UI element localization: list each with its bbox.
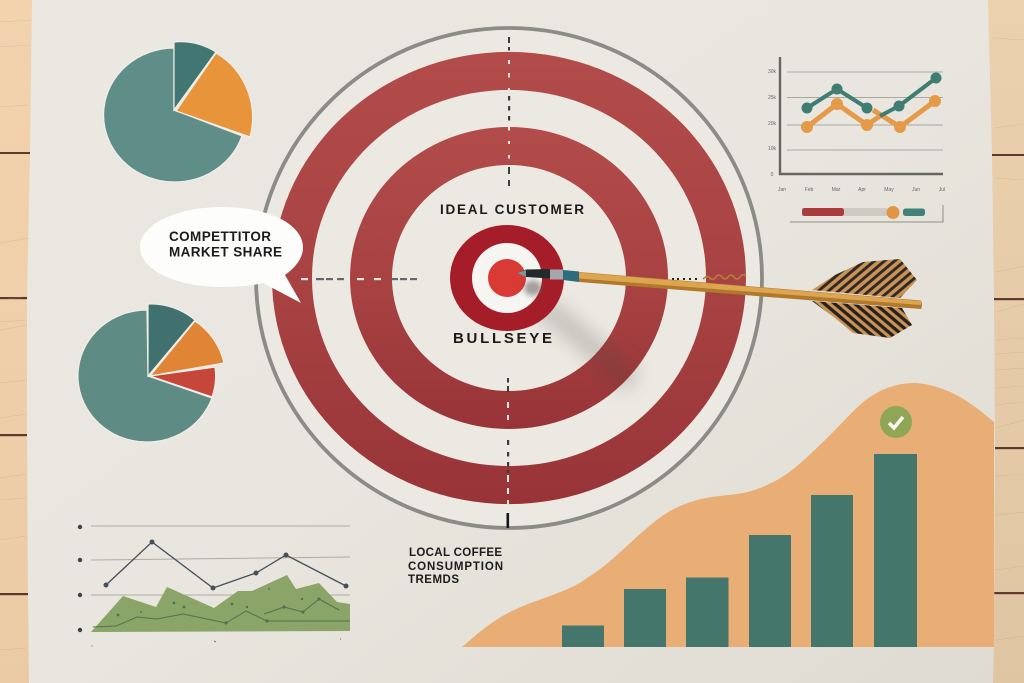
legend bar	[790, 205, 943, 222]
inner green lines	[93, 588, 350, 627]
callout: competitor market share: COMPETTITOR	[169, 229, 271, 244]
axis labels: 30k	[768, 69, 777, 75]
label: local coffee consumption trends: TREMDS	[408, 574, 459, 586]
axis labels: 20k	[768, 121, 777, 127]
bars	[562, 454, 917, 647]
label: local coffee consumption trends: LOCAL COFFEE	[409, 547, 502, 559]
dark line	[104, 540, 348, 590]
callout: competitor market share	[140, 207, 303, 303]
line chart: top right	[768, 57, 945, 222]
axis labels: Apr	[858, 187, 866, 193]
axis labels: Feb	[805, 187, 814, 193]
pie chart: top	[104, 42, 253, 182]
tip and collar	[517, 269, 579, 282]
icon: check badge	[880, 406, 912, 438]
outer red ring	[272, 52, 746, 504]
crosshair dashes	[301, 37, 510, 528]
area and line chart: bottom left	[78, 525, 350, 646]
axis labels: Mar	[832, 187, 841, 193]
axis labels: May	[884, 187, 894, 193]
callout: competitor market share: MARKET SHARE	[169, 244, 282, 260]
fletching	[812, 259, 917, 338]
axes	[780, 57, 943, 174]
shaft	[579, 272, 922, 309]
axis labels: 25k	[768, 95, 777, 101]
orange hill	[462, 383, 994, 647]
pie chart: bottom	[78, 304, 224, 442]
gridlines	[91, 526, 350, 595]
gridlines	[787, 72, 943, 150]
bullseye	[450, 225, 564, 331]
target outer grey ring	[256, 28, 762, 528]
arrow shadow	[525, 288, 640, 392]
teal series	[802, 72, 942, 116]
inner red ring	[350, 127, 668, 429]
target	[256, 28, 762, 528]
growth chart: bottom right	[462, 383, 994, 647]
green area	[91, 575, 350, 632]
arrow	[517, 259, 922, 338]
scribble near arrow shaft	[672, 275, 746, 279]
stray dots	[92, 639, 341, 646]
axis labels: 0	[771, 172, 774, 178]
label: local coffee consumption trends: CONSUMPTION	[408, 561, 503, 573]
label: bullseye: BULLSEYE	[453, 330, 552, 347]
axis labels: 10k	[768, 146, 777, 152]
label: local coffee consumption trends	[408, 547, 503, 586]
axis labels: Jan	[778, 187, 786, 193]
orange series	[801, 95, 941, 133]
axis labels: Jun	[912, 187, 920, 193]
axis labels	[768, 69, 945, 193]
axis labels: Jul	[939, 187, 945, 193]
label: ideal customer: IDEAL CUSTOMER	[440, 202, 584, 217]
axis dots	[78, 525, 82, 632]
